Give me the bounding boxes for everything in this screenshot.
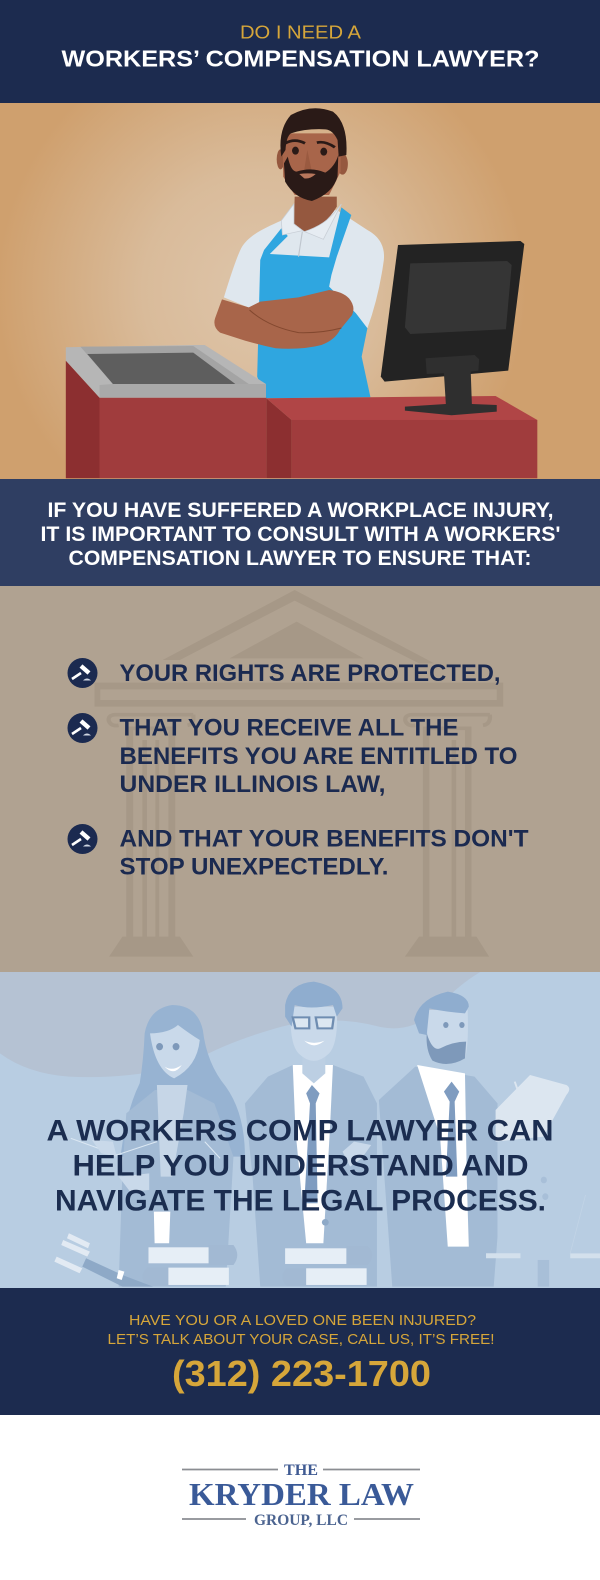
logo: The Kryder Law Group: KRYDER LAW xyxy=(189,1476,414,1512)
checklist text: THAT YOU RECEIVE ALL THE xyxy=(120,714,458,742)
bearded lawyer with tablet xyxy=(379,992,569,1287)
courthouse background xyxy=(95,590,503,957)
computer monitor xyxy=(381,241,524,415)
call to action text: LET’S TALK ABOUT YOUR CASE, CALL US, IT’S FREE! xyxy=(108,1331,494,1348)
checklist text xyxy=(120,660,529,880)
lawyers message xyxy=(46,1114,554,1218)
phone number: (312) 223-1700 xyxy=(172,1353,431,1394)
logo: The Kryder Law Group: THE xyxy=(284,1462,318,1479)
intro band xyxy=(0,479,600,586)
call to action text xyxy=(108,1312,494,1348)
intro text: IT IS IMPORTANT TO CONSULT WITH A WORKERS' xyxy=(40,523,560,546)
lawyers message: NAVIGATE THE LEGAL PROCESS. xyxy=(55,1184,546,1218)
gavel xyxy=(54,1233,153,1287)
checklist text: STOP UNEXPECTEDLY. xyxy=(120,854,388,880)
intro text: COMPENSATION LAWYER TO ENSURE THAT: xyxy=(68,547,532,570)
checklist text: BENEFITS YOU ARE ENTITLED TO xyxy=(120,743,518,770)
counter with scanner xyxy=(66,345,537,478)
logo: The Kryder Law Group xyxy=(182,1462,420,1529)
center lawyer with glasses xyxy=(245,982,377,1287)
bullet icon: gavel 2 xyxy=(68,713,98,743)
checklist text: UNDER ILLINOIS LAW, xyxy=(120,771,386,798)
call to action banner xyxy=(0,1288,600,1415)
scales of justice xyxy=(322,1177,600,1287)
books xyxy=(143,1245,372,1286)
bullet icon: gavel 3 xyxy=(68,824,98,854)
team of lawyers illustration xyxy=(0,972,600,1287)
header banner xyxy=(0,0,600,103)
checklist text: AND THAT YOUR BENEFITS DON'T xyxy=(120,826,529,852)
lawyers message: HELP YOU UNDERSTAND AND xyxy=(72,1150,528,1182)
checklist text: YOUR RIGHTS ARE PROTECTED, xyxy=(120,660,500,687)
bullet icon: gavel 1 xyxy=(68,658,98,688)
woman lawyer xyxy=(71,1005,245,1287)
intro text: IF YOU HAVE SUFFERED A WORKPLACE INJURY, xyxy=(48,499,554,522)
panel: lawyers xyxy=(0,972,600,1288)
logo: The Kryder Law Group: GROUP, LLC xyxy=(254,1512,348,1529)
call to action text: HAVE YOU OR A LOVED ONE BEEN INJURED? xyxy=(129,1312,476,1329)
intro text xyxy=(40,499,560,570)
header eyebrow: DO I NEED A xyxy=(240,22,362,42)
worker figure xyxy=(214,108,384,398)
hero illustration: cashier at counter xyxy=(0,103,600,479)
panel: rights checklist xyxy=(0,586,600,972)
lawyers message: A WORKERS COMP LAWYER CAN xyxy=(46,1114,554,1148)
main title: WORKERS’ COMPENSATION LAWYER? xyxy=(62,46,540,72)
